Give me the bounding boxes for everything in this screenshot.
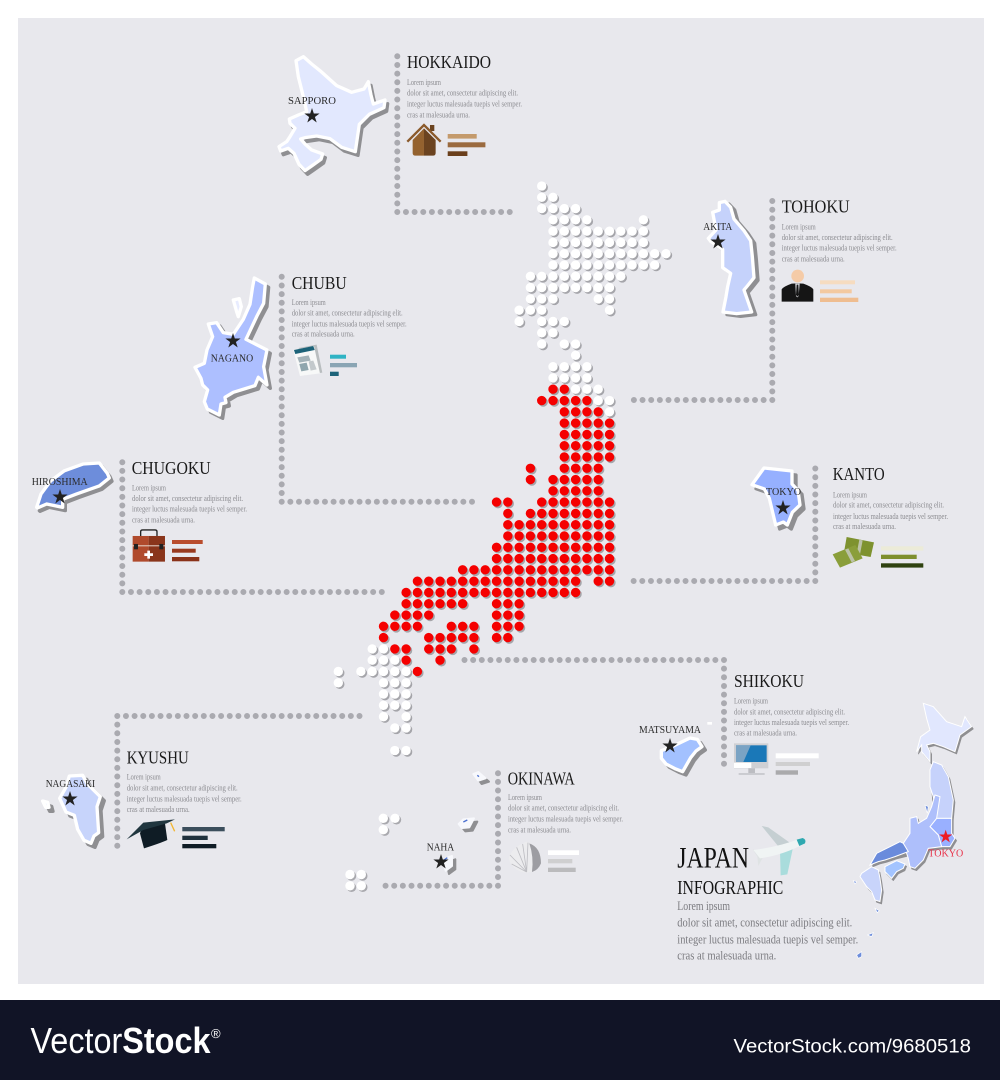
bars: Kyushu (182, 827, 225, 848)
body text: integer luctus malesuada tuepis vel semper. (782, 244, 897, 253)
region: Tohoku (930, 762, 953, 818)
panel: Chubu (195, 273, 407, 418)
region: Hokkaido (917, 703, 972, 762)
body text: dolor sit amet, consectetur adipiscing elit. (132, 494, 243, 503)
icon: computer monitor (734, 743, 768, 775)
intro text: dolor sit amet, consectetur adipiscing elit. (677, 915, 852, 930)
body text (833, 490, 948, 531)
body text (508, 793, 623, 835)
body text: dolor sit amet, consectetur adipiscing elit. (407, 89, 518, 98)
Okinawa dots (345, 814, 401, 892)
body text (127, 772, 242, 814)
heading: Infographic: INFOGRAPHIC (677, 877, 783, 899)
dot-matrix map of Japan (338, 186, 668, 752)
icon: medical case (133, 530, 165, 562)
dot shadows (340, 188, 668, 752)
bars: Shikoku (776, 753, 819, 775)
title block (677, 826, 858, 962)
body text: dolor sit amet, consectetur adipiscing elit. (833, 501, 944, 510)
body text: Lorem ipsum (508, 793, 543, 802)
star: Tokyo capital (939, 830, 952, 842)
map: Shikoku (661, 722, 712, 775)
body text (782, 222, 897, 263)
bars: Okinawa (548, 850, 579, 872)
star: Hiroshima (52, 489, 68, 503)
star: Tokyo (775, 500, 791, 514)
white dots: rest of Japan (338, 186, 666, 750)
star: Naha (433, 854, 449, 868)
map: Okinawa islands (443, 772, 489, 874)
body text: cras at malesuada urna. (127, 805, 190, 814)
heading: Tohoku: TOHOKU (782, 197, 850, 217)
bars: Kanto (881, 546, 923, 568)
body text: cras at malesuada urna. (407, 110, 470, 119)
city label: Nagasaki: NAGASAKI (46, 778, 95, 790)
body text: dolor sit amet, consectetur adipiscing elit. (734, 707, 845, 716)
body text: integer luctus malesuada tuepis vel semper. (132, 505, 247, 514)
map: Chubu (195, 278, 270, 418)
intro text: cras at malesuada urna. (677, 947, 776, 962)
heading: Chugoku: CHUGOKU (132, 458, 211, 478)
star: Sapporo (304, 108, 320, 122)
map: Chugoku (37, 463, 112, 511)
region: Kyushu (860, 867, 882, 902)
city label: Akita: AKITA (703, 221, 732, 233)
bars: Hokkaido (448, 134, 485, 156)
heading: Chubu: CHUBU (292, 273, 347, 293)
label: Tokyo capital: TOKYO (928, 848, 963, 860)
body text: dolor sit amet, consectetur adipiscing elit. (127, 784, 238, 793)
body text: Lorem ipsum (132, 483, 167, 492)
body text: Lorem ipsum (833, 490, 868, 499)
icon: airplane (753, 826, 805, 875)
body text (407, 78, 522, 119)
map: Hokkaido (279, 57, 388, 174)
small map of Japan (853, 703, 973, 958)
city label: Hiroshima: HIROSHIMA (32, 476, 88, 488)
star: Akita (710, 234, 726, 248)
region: Chugoku (870, 842, 908, 865)
footer bar (0, 1000, 1000, 1080)
logo: registered mark: ® (211, 1026, 221, 1041)
icon: money (833, 537, 874, 568)
body text: Lorem ipsum (292, 298, 326, 307)
heading: Okinawa: OKINAWA (508, 768, 575, 788)
icon: seashell (509, 842, 541, 873)
body text: integer luctus malesuada tuepis vel semper. (127, 794, 242, 803)
body text: dolor sit amet, consectetur adipiscing elit. (292, 309, 403, 318)
star: Nagasaki (62, 791, 78, 805)
body text: cras at malesuada urna. (782, 254, 845, 263)
panel: Kyushu (43, 747, 242, 848)
body text: Lorem ipsum (127, 772, 161, 781)
panel: Shikoku (639, 671, 849, 775)
body text: cras at malesuada urna. (508, 826, 571, 835)
body text (292, 298, 407, 339)
icon: newspaper (293, 345, 322, 376)
city label: Sapporo: SAPPORO (288, 95, 336, 107)
intro text: Lorem ipsum (677, 898, 730, 913)
body text: cras at malesuada urna. (132, 515, 195, 524)
map: Kanto (752, 468, 804, 529)
intro text (677, 898, 858, 962)
city label: Tokyo: TOKYO (766, 486, 801, 498)
panel: Okinawa (427, 768, 623, 874)
body text: cras at malesuada urna. (833, 522, 896, 531)
body text: integer luctus malesuada tuepis vel semper. (292, 320, 407, 329)
islands (853, 805, 928, 958)
city label: Nagano: NAGANO (211, 353, 253, 365)
heading: Shikoku: SHIKOKU (734, 671, 804, 691)
map: Kyushu (43, 775, 104, 847)
body text: integer luctus malesuada tuepis vel semper. (833, 512, 948, 521)
footer id text: VectorStock.com/9680518 (734, 1036, 971, 1058)
icon: graduation cap (127, 819, 175, 848)
heading: Hokkaido: HOKKAIDO (407, 52, 491, 72)
heading: Kanto: KANTO (833, 464, 885, 484)
heading: Kyushu: KYUSHU (127, 747, 189, 767)
icon: businessman (782, 270, 813, 302)
bars: Chugoku (172, 540, 203, 561)
body text: dolor sit amet, consectetur adipiscing elit. (782, 233, 893, 242)
panel: Kanto (752, 464, 948, 568)
panel: Tohoku (703, 197, 897, 316)
body text: Lorem ipsum (782, 222, 816, 231)
intro text: integer luctus malesuada tuepis vel semper. (677, 931, 858, 946)
body text (734, 696, 849, 738)
body text: Lorem ipsum (407, 78, 442, 87)
region: Kanto (930, 818, 955, 847)
city label: Naha: NAHA (427, 842, 454, 854)
logo: VectorStock: VectorStock (30, 1020, 211, 1061)
dotted leader lines (117, 56, 815, 886)
body text: integer luctus malesuada tuepis vel semper. (508, 815, 623, 824)
bars: Tohoku (820, 280, 858, 302)
body text: dolor sit amet, consectetur adipiscing elit. (508, 804, 619, 813)
city label: Matsuyama: MATSUYAMA (639, 724, 701, 736)
body text: integer luctus malesuada tuepis vel semper. (734, 718, 849, 727)
map shadow (862, 706, 973, 904)
red dots: highlighted Honshu (384, 389, 610, 671)
panel: Chugoku (32, 458, 247, 562)
region: Shikoku (885, 861, 905, 878)
region: Chubu (903, 795, 942, 868)
body text (132, 483, 247, 524)
bars: Chubu (330, 355, 357, 376)
panel: Hokkaido (279, 52, 522, 174)
body text: cras at malesuada urna. (292, 330, 355, 339)
star: Matsuyama (662, 738, 678, 752)
map: Tohoku (708, 201, 758, 316)
body text: integer luctus malesuada tuepis vel semper. (407, 100, 522, 109)
body text: Lorem ipsum (734, 696, 769, 705)
icon: house (407, 125, 441, 156)
star: Nagano (225, 333, 241, 347)
heading: Japan: JAPAN (677, 841, 749, 874)
body text: cras at malesuada urna. (734, 729, 797, 738)
